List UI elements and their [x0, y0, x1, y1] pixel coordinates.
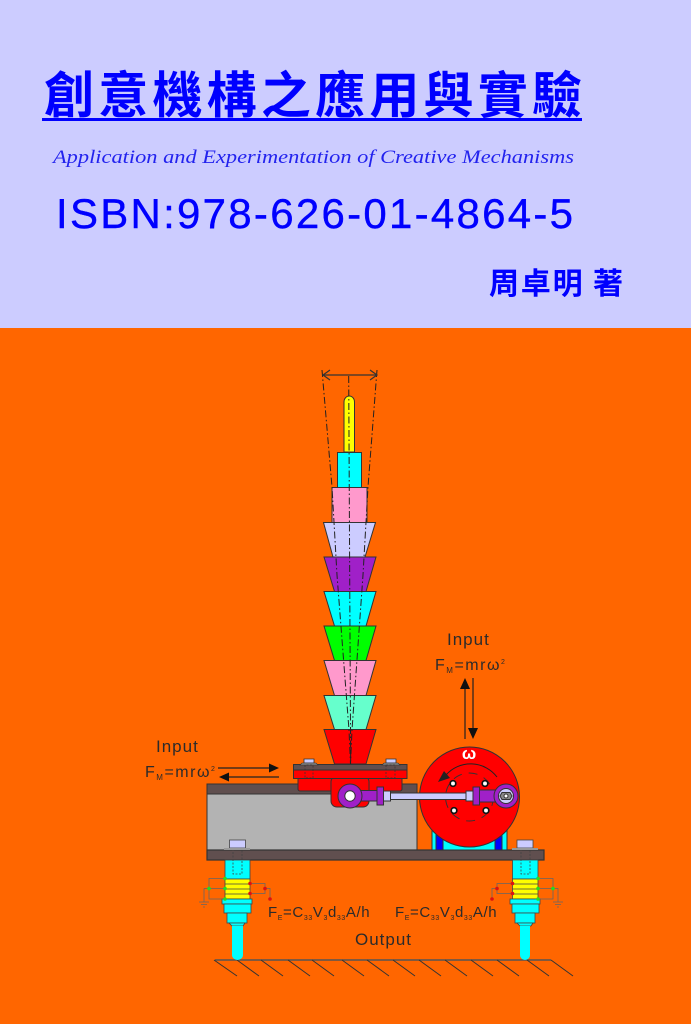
- formula: left output force: 33: [304, 915, 313, 922]
- formula: right output force: V: [440, 904, 450, 921]
- piezo tower stack: [324, 396, 376, 764]
- disc holes: [450, 781, 489, 813]
- formula: right output force: 33: [431, 915, 440, 922]
- title: 創意機構之應用與實驗: [44, 56, 582, 128]
- isbn: ISBN:978-626-01-4864-5: [56, 190, 573, 237]
- pink trapezoid: [324, 660, 376, 696]
- right wiring: [492, 878, 563, 907]
- formula: left output force: d: [328, 904, 337, 921]
- formula: left input force: M: [156, 773, 164, 782]
- formula: right output force: 3: [450, 915, 455, 922]
- label: input top: Input: [447, 630, 490, 649]
- label: output: Output: [355, 930, 412, 949]
- left terminals: [207, 877, 272, 901]
- motor support: [432, 826, 507, 850]
- mounting clamp: [294, 759, 407, 807]
- aquamarine trapezoid: [324, 696, 376, 730]
- formula: left output force: F: [268, 904, 278, 921]
- formula: right output force: d: [455, 904, 464, 921]
- arrows: horizontal input force: [218, 764, 279, 782]
- motor disc: [420, 744, 520, 847]
- lavender trapezoid: [324, 522, 376, 557]
- pink block: [332, 488, 367, 522]
- panel: header band: [0, 0, 691, 328]
- right piezo actuator: [490, 840, 563, 960]
- cyan block: [338, 452, 362, 488]
- formula: left input force: 2: [211, 766, 216, 773]
- english subtitle: Application and Experimentation of Creative Mechanisms: [51, 147, 574, 168]
- omega label: ω: [462, 744, 476, 763]
- amplitude double arrow: [323, 370, 377, 380]
- red trapezoid: [324, 730, 376, 764]
- formula: top input force: F: [435, 657, 446, 674]
- formula: left output force: V: [313, 904, 323, 921]
- formula: left output force: =C: [283, 904, 304, 921]
- label: input left: Input: [156, 737, 199, 756]
- green trapezoid: [324, 626, 376, 660]
- formula: right output force: A/h: [473, 904, 497, 921]
- formula: right output force: E: [405, 915, 410, 922]
- arrows: vertical input force: [460, 678, 478, 739]
- vibration envelope centerlines: [322, 370, 377, 764]
- yellow pin: [344, 396, 354, 452]
- connecting rod: [338, 784, 518, 808]
- formula: left output force: 33: [337, 915, 346, 922]
- left wiring: [199, 878, 270, 907]
- formula: left input force: =mrω: [164, 764, 211, 781]
- ground with hatching: [214, 960, 573, 976]
- cyan trapezoid: [324, 592, 376, 626]
- formula: left output force: 3: [323, 915, 328, 922]
- formula: left output force: A/h: [346, 904, 370, 921]
- formula: right output force: 33: [464, 915, 473, 922]
- formula: right output force: F: [395, 904, 405, 921]
- author: 周卓明 著: [489, 259, 623, 303]
- formula: left input force: F: [145, 764, 156, 781]
- formula: top input force: 2: [501, 659, 506, 666]
- left piezo actuator: [199, 840, 272, 960]
- formula: right output force: =C: [410, 904, 431, 921]
- purple trapezoid: [324, 557, 376, 592]
- right terminals: [490, 877, 555, 901]
- beam: [207, 784, 544, 860]
- rotation arrow: [438, 764, 497, 782]
- formula: left output force: E: [278, 915, 283, 922]
- formula: top input force: =mrω: [454, 657, 501, 674]
- formula: top input force: M: [446, 666, 454, 675]
